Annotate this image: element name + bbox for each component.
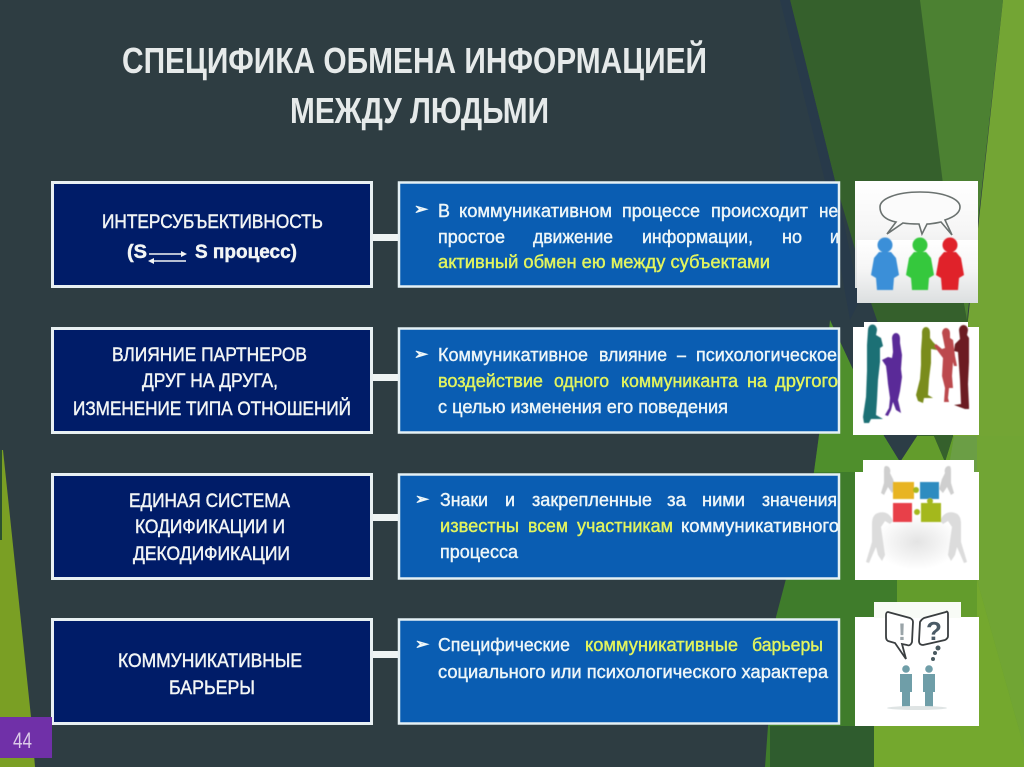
right box: text <box>399 328 839 432</box>
right box: text: закрепленные <box>532 490 652 510</box>
row 2 <box>52 322 979 435</box>
right box: text: – <box>677 345 686 365</box>
right box: text: коммуникативные <box>585 635 738 655</box>
right box: text: влияние <box>599 345 667 365</box>
right box: text: значения <box>762 490 837 510</box>
left box: partner influence: ИЗМЕНЕНИЕ ТИПА ОТНОШЕНИЙ <box>73 398 351 420</box>
right box: text: одного <box>554 371 609 391</box>
connector <box>373 514 398 521</box>
image: talking silhouettes <box>853 322 979 435</box>
right box: text: В <box>438 201 450 221</box>
right box: text: воздействие <box>438 371 543 391</box>
right box: text: известны <box>440 516 519 536</box>
image: two people with question and exclamation bubbles: ! <box>898 619 906 646</box>
right box: text <box>399 474 839 578</box>
title: МЕЖДУ ЛЮДЬМИ <box>290 90 549 131</box>
image: two people with question and exclamation bubbles: ? <box>926 616 942 646</box>
left box: intersubjectivity: S процесс) <box>195 242 297 263</box>
right box: text: не <box>819 201 838 221</box>
right box: text: движение <box>533 227 613 247</box>
page number <box>0 717 52 758</box>
image: figures assembling puzzle <box>855 460 979 580</box>
right box: text: процесса <box>440 542 519 562</box>
left box: partner influence <box>52 328 372 432</box>
right box: text: процессе <box>622 201 700 221</box>
image: two people with question and exclamation bubbles <box>855 602 979 726</box>
left box: communication barriers: КОММУНИКАТИВНЫЕ <box>118 651 302 672</box>
right box: text: другого <box>775 371 838 391</box>
connector <box>373 651 398 658</box>
right box: text: участникам <box>577 516 673 536</box>
right box: text: информации, <box>642 227 753 247</box>
right box: text: активный обмен ею между субъектами <box>438 252 770 272</box>
right box: text: за <box>667 490 687 510</box>
bullet: ➢ <box>415 491 429 508</box>
left box: communication barriers <box>52 620 372 724</box>
right box: text: коммуниканта <box>621 371 739 391</box>
right box: text: с целью изменения его поведения <box>438 397 728 417</box>
connector <box>373 234 398 241</box>
left box: intersubjectivity <box>52 182 372 286</box>
left box: partner influence: ДРУГ НА ДРУГА, <box>142 371 278 392</box>
right box: text: Знаки <box>440 490 488 510</box>
icon: two-way arrows <box>148 251 187 264</box>
left box: partner influence: ВЛИЯНИЕ ПАРТНЕРОВ <box>112 345 307 366</box>
right box: text: простое <box>438 227 505 247</box>
image: three people with speech bubble <box>855 181 978 303</box>
bullet: ➢ <box>414 346 428 363</box>
right box: text: коммуникативного <box>681 516 839 536</box>
right box: text: ними <box>702 490 745 510</box>
left box: intersubjectivity: (S <box>127 242 147 263</box>
title: СПЕЦИФИКА ОБМЕНА ИНФОРМАЦИЕЙ <box>122 39 707 81</box>
left box: unified codification: ДЕКОДИФИКАЦИИ <box>133 544 290 565</box>
right box: text: социального или психологического характера <box>438 662 829 682</box>
left box: communication barriers: БАРЬЕРЫ <box>169 678 255 699</box>
row 4 <box>52 602 979 726</box>
right box: text: Коммуникативное <box>438 345 588 365</box>
bullet: ➢ <box>415 636 429 653</box>
right box: text: на <box>747 371 768 391</box>
right box: text: но <box>782 227 802 247</box>
right box: text: Специфические <box>438 635 570 655</box>
puzzle pieces <box>893 482 941 522</box>
left box: unified codification: КОДИФИКАЦИИ И <box>135 517 285 538</box>
right box: text <box>399 182 839 286</box>
right box: text <box>399 620 839 724</box>
left box: intersubjectivity: ИНТЕРСУБЪЕКТИВНОСТЬ <box>102 212 323 233</box>
right box: text: и <box>505 490 515 510</box>
right box: text: психологическое <box>696 345 837 365</box>
row 1 <box>52 181 978 303</box>
right box: text: барьеры <box>752 635 823 655</box>
left box: unified codification <box>52 474 372 578</box>
right box: text: коммуникативном <box>459 201 612 221</box>
bullet: ➢ <box>414 201 428 218</box>
row 3 <box>52 460 979 580</box>
page number: 44 <box>13 728 32 753</box>
connector <box>373 374 398 381</box>
right box: text: происходит <box>711 201 808 221</box>
left box: unified codification: ЕДИНАЯ СИСТЕМА <box>129 491 290 512</box>
right box: text: всем <box>528 516 568 536</box>
right box: text: и <box>830 227 839 247</box>
title <box>122 39 707 131</box>
